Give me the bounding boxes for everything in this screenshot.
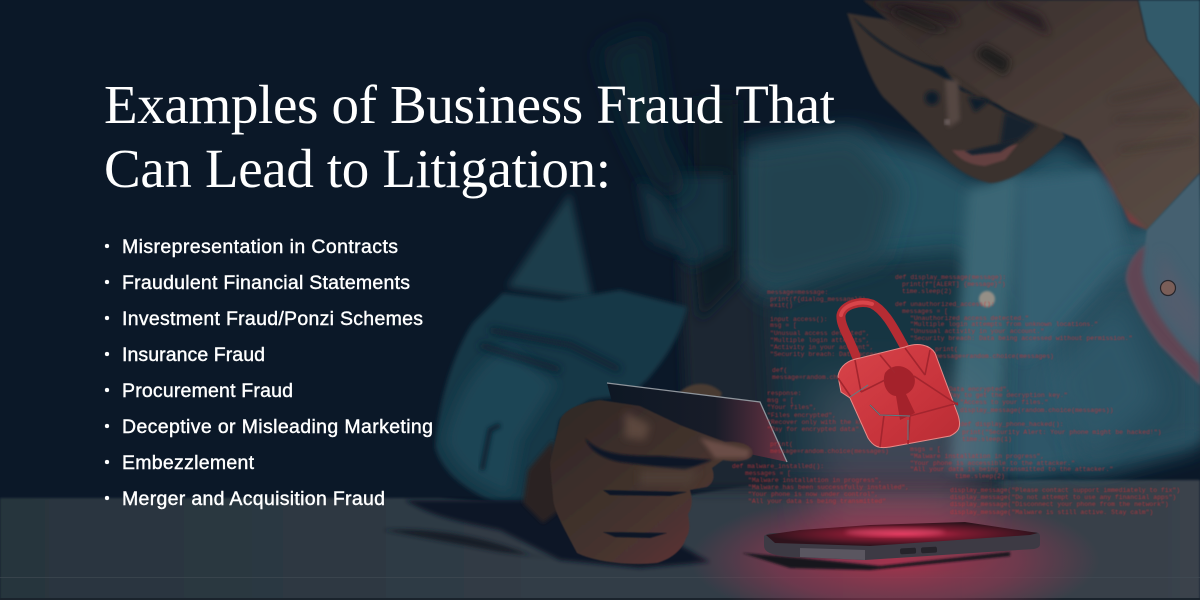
phone screen: [766, 522, 1038, 546]
credit card: [607, 383, 787, 462]
hologram code text: "Malware installation in progress",: [910, 453, 1044, 460]
phone: [742, 522, 1040, 570]
hologram code text: "Activity in your account",: [770, 344, 874, 351]
red table glow: [690, 492, 1100, 600]
face: [847, 13, 1065, 183]
shirt upper-right corner: [1138, 0, 1200, 110]
hologram code text: "Your phone is accessible to the attacker.": [910, 460, 1075, 467]
hologram code text: "Security breach: Data accessed": [770, 351, 893, 358]
bullet: Embezzlement: Embezzlement: [122, 452, 255, 474]
hologram code text: msg = [: [770, 322, 797, 329]
hologram code text: display_message("Do not attempt to use any financial apps"): [950, 494, 1176, 501]
faint shirt streaks: [600, 30, 690, 200]
dark eye shadow: [853, 17, 1037, 127]
hologram code text: def display_message(message):: [895, 274, 1006, 281]
hologram code text: print(: [935, 346, 958, 353]
title: Can Lead to Litigation:: [104, 138, 611, 199]
wrist: [523, 440, 560, 523]
hologram code text: print(f{dialog_message}"): [770, 296, 866, 303]
hologram code text: msg = [: [767, 397, 794, 404]
shirt dark side: [745, 135, 900, 290]
hologram code text: "Unusual access detected",: [770, 330, 870, 337]
hologram code text: print("Security Alert: Your phone might be hacked!"): [962, 429, 1161, 436]
hologram code text: def display_phone_hacked():: [960, 421, 1064, 428]
hologram code text: time.sleep(2): [955, 473, 1005, 480]
hologram code text: exit(): [770, 302, 793, 309]
hologram code text: "Multiple login attempts",: [770, 337, 870, 344]
hologram code text: def unauthorized_access():: [895, 301, 995, 308]
hologram code text: "Unauthorized access detected.": [910, 315, 1029, 322]
hologram code text: print(f"[ALERT] {message}"): [902, 281, 1006, 288]
bullet: Insurance Fraud: Insurance Fraud: [122, 344, 265, 366]
hologram code text: "Security breach: Data being accessed without permission.": [910, 335, 1132, 342]
hologram code text: time.sleep(1): [962, 436, 1012, 443]
hologram code text: msgs = [: [910, 446, 941, 453]
hologram code text: "Malware installation in progress",: [748, 477, 882, 484]
nose highlight: [945, 80, 960, 128]
hologram code text: def(: [772, 367, 787, 374]
hologram code text: message=random.choice(messages): [770, 448, 889, 455]
phone shadow: [742, 552, 1010, 570]
hologram code text: [732, 274, 1180, 516]
dark fold: [693, 100, 740, 320]
hologram code text: message=message:: [767, 289, 828, 296]
hand holding credit card: [523, 383, 787, 564]
torso shadow region: [680, 260, 1000, 490]
hologram code text: print(: [770, 441, 793, 448]
bullet list: [105, 236, 433, 510]
sleeve: left arm: [435, 290, 687, 517]
mouth: [952, 144, 1018, 166]
hologram code text: display_message("Malware is still active. Stay calm"): [950, 509, 1153, 516]
bullet: Procurement Fraud: Procurement Fraud: [122, 380, 293, 402]
hologram code text: "Pay to get the decryption key.": [945, 392, 1068, 399]
bullet: Deceptive or Misleading Marketing: Deceptive or Misleading Marketing: [122, 416, 433, 438]
lock body: [838, 345, 960, 448]
title: Examples of Business Fraud That: [104, 74, 835, 135]
hologram code text: messages = [: [902, 308, 948, 315]
phone buttons: [900, 548, 916, 554]
icon: cracked red padlock: [838, 303, 960, 448]
hologram code text: display_message("Please contact support immediately to fix"): [950, 487, 1180, 494]
hologram code text: input access():: [770, 316, 828, 323]
table shadows: [405, 500, 710, 568]
fist: [550, 400, 753, 564]
shackle: [841, 303, 904, 356]
cracks: [838, 348, 958, 447]
table surface: [0, 480, 1200, 600]
bullet: Investment Fraud/Ponzi Schemes: Investment Fraud/Ponzi Schemes: [122, 308, 423, 330]
hologram code text: response:: [767, 390, 802, 397]
bullet: Fraudulent Financial Statements: Fraudulent Financial Statements: [122, 272, 410, 294]
hologram code text: "Malware has been successfully installed",: [748, 484, 909, 491]
thumb: [680, 384, 722, 410]
title: [104, 74, 835, 199]
fingers separators: [585, 438, 712, 470]
bullet: Merger and Acquisition Fraud: Merger and Acquisition Fraud: [122, 488, 385, 510]
hologram beam: [815, 380, 975, 530]
bullet: Misrepresentation in Contracts: Misrepresentation in Contracts: [122, 236, 398, 258]
hologram code text: display_message("Disconnect your phone from the network"): [950, 501, 1169, 508]
shirt placket: [950, 175, 1020, 470]
hand on head: [863, 0, 1200, 230]
hologram code text: "Access to your files.": [960, 399, 1048, 406]
hologram code text: "All your data is being transmitted to the attacker.": [910, 466, 1113, 473]
hologram code text: messages = [: [745, 470, 791, 477]
hologram code text: "Unusual activity in your account.": [910, 328, 1044, 335]
hologram code text: "Data encrypted",: [945, 386, 1010, 393]
hologram code text: "Recover only with the key",: [767, 419, 874, 426]
knuckle highlight: [625, 412, 650, 440]
button: [979, 291, 995, 307]
shirt torso: [745, 130, 1200, 480]
hologram code text: "All your data is being transmitted": [748, 498, 886, 505]
hologram code text: display_message(random.choice(messages)): [960, 407, 1113, 414]
hologram code text: "Pay for encrypted data": [767, 426, 859, 433]
shirt cuff: [1126, 173, 1200, 385]
phone body: [764, 532, 1040, 560]
hologram code text: message=random.choice(: [772, 374, 856, 381]
hologram code text: time.sleep(2): [902, 288, 952, 295]
beam core: [845, 528, 945, 536]
hologram code text: "Files encrypted",: [767, 412, 836, 419]
keyhole: [884, 366, 915, 420]
hologram code text: "Your phone is now under control",: [748, 491, 878, 498]
hologram code text: "Your files",: [767, 404, 817, 411]
hologram code text: def malware_installed():: [732, 463, 824, 470]
hologram code text: message=random.choice(messages): [935, 353, 1054, 360]
hologram code text: "Multiple login attempts from unknown locations.": [910, 321, 1098, 328]
